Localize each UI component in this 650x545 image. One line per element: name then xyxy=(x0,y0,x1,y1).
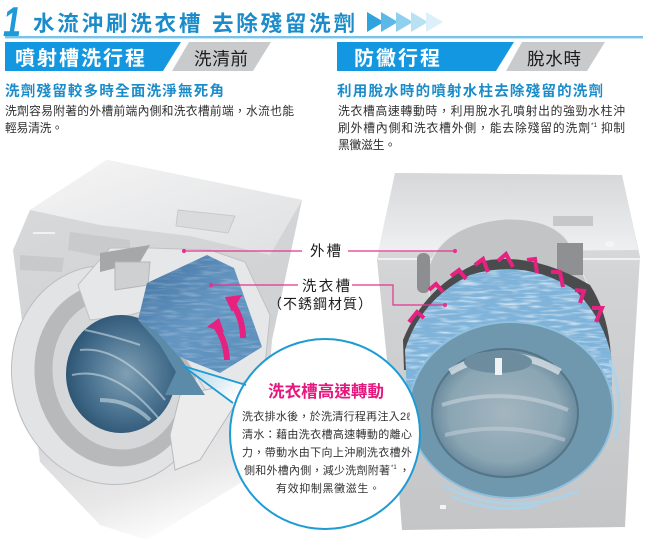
drum front band xyxy=(138,320,205,395)
machine body xyxy=(377,173,640,530)
callout body text xyxy=(242,409,412,495)
control panel xyxy=(20,210,235,272)
label: 洗衣槽: 洗衣槽 xyxy=(302,278,350,295)
callout body text: ， xyxy=(399,465,410,477)
label: 不銹鋼材質: （不銹鋼材質） xyxy=(268,296,372,312)
drum opening xyxy=(66,315,176,433)
tab: 噴射槽洗行程 xyxy=(5,42,181,71)
right body text: 洗衣槽高速轉動時，利用脫水孔噴射出的強勁水柱沖 xyxy=(338,104,625,118)
machine top xyxy=(30,160,302,255)
illustration: left washing machine xyxy=(0,160,302,540)
callout body text: 有效抑制黑黴滋生。 xyxy=(276,481,380,495)
right body text: 抑制 xyxy=(601,121,625,135)
callout: high-speed drum rotation xyxy=(183,339,420,529)
machine body xyxy=(13,160,302,540)
tab: 噴射槽洗行程: 噴射槽洗行程 xyxy=(15,47,145,70)
tab: 脫水時: 脫水時 xyxy=(527,49,581,69)
drum interior xyxy=(442,351,568,440)
pink spray arrows xyxy=(409,254,602,322)
right body text xyxy=(338,104,625,152)
outer tub xyxy=(428,219,590,300)
grid vent xyxy=(557,243,583,275)
left subheading: 洗劑殘留較多時全面洗淨無死角 xyxy=(5,82,224,100)
callout body text: *1 xyxy=(391,465,397,471)
tab: 洗清前 xyxy=(172,42,271,71)
left body text: 洗劑容易附著的外槽前端內側和洗衣槽前端，水流也能 xyxy=(5,104,294,118)
illustration: right washing machine xyxy=(377,173,640,530)
callout body text: 側和外槽內側，減少洗劑附著 xyxy=(244,463,390,477)
dark tub rim xyxy=(403,259,612,370)
pink flow arrows xyxy=(217,304,243,360)
blue water drum xyxy=(405,269,612,420)
left body text xyxy=(5,104,294,135)
machine top xyxy=(378,173,638,252)
text block: left description xyxy=(5,82,294,135)
blue washing drum xyxy=(138,255,262,373)
drum front ring xyxy=(409,322,613,498)
right body text: *1 xyxy=(591,122,598,129)
label: 外槽: 外槽 xyxy=(310,243,341,260)
drum opening xyxy=(432,349,578,477)
door ring xyxy=(0,247,229,503)
title header xyxy=(3,0,443,45)
panel: left tab xyxy=(5,42,271,71)
leader: outer tub xyxy=(182,250,456,252)
tab: 防黴行程 xyxy=(337,42,514,71)
right subheading: 利用脫水時的噴射水柱去除殘留的洗劑 xyxy=(337,82,603,100)
right body text: 黑黴滋生。 xyxy=(338,138,396,152)
control details xyxy=(378,216,640,509)
callout body text: 力，帶動水由下向上沖刷洗衣槽外 xyxy=(242,445,412,459)
callout circle xyxy=(230,339,420,529)
icon: fading arrows xyxy=(367,12,443,32)
callout pointer xyxy=(183,366,256,404)
right body text: 刷外槽內側和洗衣槽外側，能去除殘留的洗劑 xyxy=(338,121,590,135)
callout tail xyxy=(183,366,246,403)
text block: right description xyxy=(337,82,625,152)
outer tub cutaway frame xyxy=(78,248,270,405)
header rule xyxy=(5,36,643,38)
water splash xyxy=(442,360,619,509)
callout heading: 洗衣槽高速轉動 xyxy=(268,381,384,401)
panel: right tab xyxy=(337,42,605,71)
main title: 水流沖刷洗衣槽 去除殘留洗劑 xyxy=(33,11,355,36)
callout body text: 洗衣排水後，於洗清行程再注入2ℓ xyxy=(242,409,410,423)
tab: 洗清前: 洗清前 xyxy=(194,49,248,69)
tab: 防黴行程: 防黴行程 xyxy=(354,47,440,70)
leader lines and part labels xyxy=(182,243,456,312)
tab: 脫水時 xyxy=(506,42,605,71)
hose xyxy=(417,253,430,293)
left body text: 輕易清洗。 xyxy=(5,121,63,135)
callout body text: 清水：藉由洗衣槽高速轉動的離心 xyxy=(242,427,412,441)
leader: washing drum xyxy=(210,284,446,306)
